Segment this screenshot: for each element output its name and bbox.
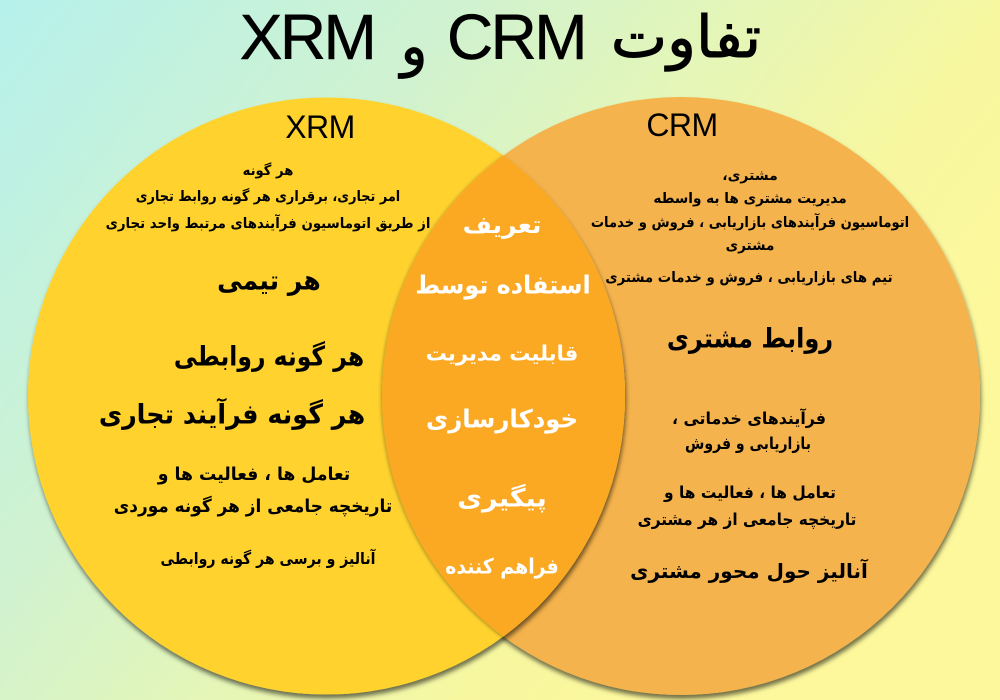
- heading: XRM: XRM: [285, 109, 355, 145]
- heading: CRM: CRM: [646, 107, 718, 143]
- text: overlap automation: خودکارسازی: [426, 404, 578, 434]
- text: CRM tracking: تعامل ها ، فعالیت ها و: [664, 483, 836, 502]
- text: XRM used by: هر تیمی: [217, 266, 321, 296]
- text: overlap management: قابلیت مدیریت: [426, 342, 578, 366]
- title: XRM: [240, 1, 374, 73]
- text: XRM tracking: [114, 464, 392, 517]
- text: CRM automation: فرآیندهای خدماتی ،: [672, 409, 826, 428]
- title: CRM: [447, 1, 585, 73]
- text: CRM automation: بازاریابی و فروش: [685, 434, 811, 453]
- text: CRM tracking: [638, 483, 856, 530]
- text: CRM definition: مشتری،: [722, 168, 778, 184]
- text: overlap provides: فراهم کننده: [445, 554, 559, 578]
- text: XRM automation: هر گونه فرآیند تجاری: [99, 400, 365, 430]
- text: XRM definition: از طریق اتوماسیون فرآیندهای مرتبط واحد تجاری: [106, 216, 430, 232]
- text: CRM definition: مشتری: [726, 238, 774, 254]
- text: XRM definition: امر تجاری، برقراری هر گونه روابط تجاری: [136, 189, 400, 205]
- text: CRM tracking: تاریخچه جامعی از هر مشتری: [638, 510, 856, 529]
- text: CRM definition: اتوماسیون فرآیندهای بازاریابی ، فروش و خدمات: [591, 215, 909, 231]
- text: CRM definition: [591, 168, 909, 254]
- text: overlap definition: تعریف: [463, 211, 541, 239]
- text: XRM management: هر گونه روابطی: [174, 342, 364, 372]
- text: XRM definition: [106, 162, 430, 232]
- text: XRM tracking: تاریخچه جامعی از هر گونه موردی: [114, 496, 392, 517]
- title: و: [400, 14, 428, 79]
- text: XRM provides: آنالیز و برسی هر گونه روابطی: [161, 549, 375, 568]
- title: [240, 1, 761, 79]
- text: CRM provides: آنالیز حول محور مشتری: [630, 559, 868, 583]
- title: تفاوت: [611, 3, 761, 71]
- text: XRM tracking: تعامل ها ، فعالیت ها و: [158, 464, 350, 485]
- text: CRM automation: [672, 408, 826, 454]
- text: CRM used by: تیم های بازاریابی ، فروش و خدمات مشتری: [605, 270, 893, 286]
- text: overlap tracking: پیگیری: [457, 484, 547, 512]
- text: overlap used by: استفاده توسط: [415, 270, 591, 300]
- text: CRM definition: مدیریت مشتری ها به واسطه: [653, 191, 847, 207]
- text: XRM definition: هر گونه: [243, 163, 293, 179]
- text: CRM management: روابط مشتری: [667, 324, 833, 354]
